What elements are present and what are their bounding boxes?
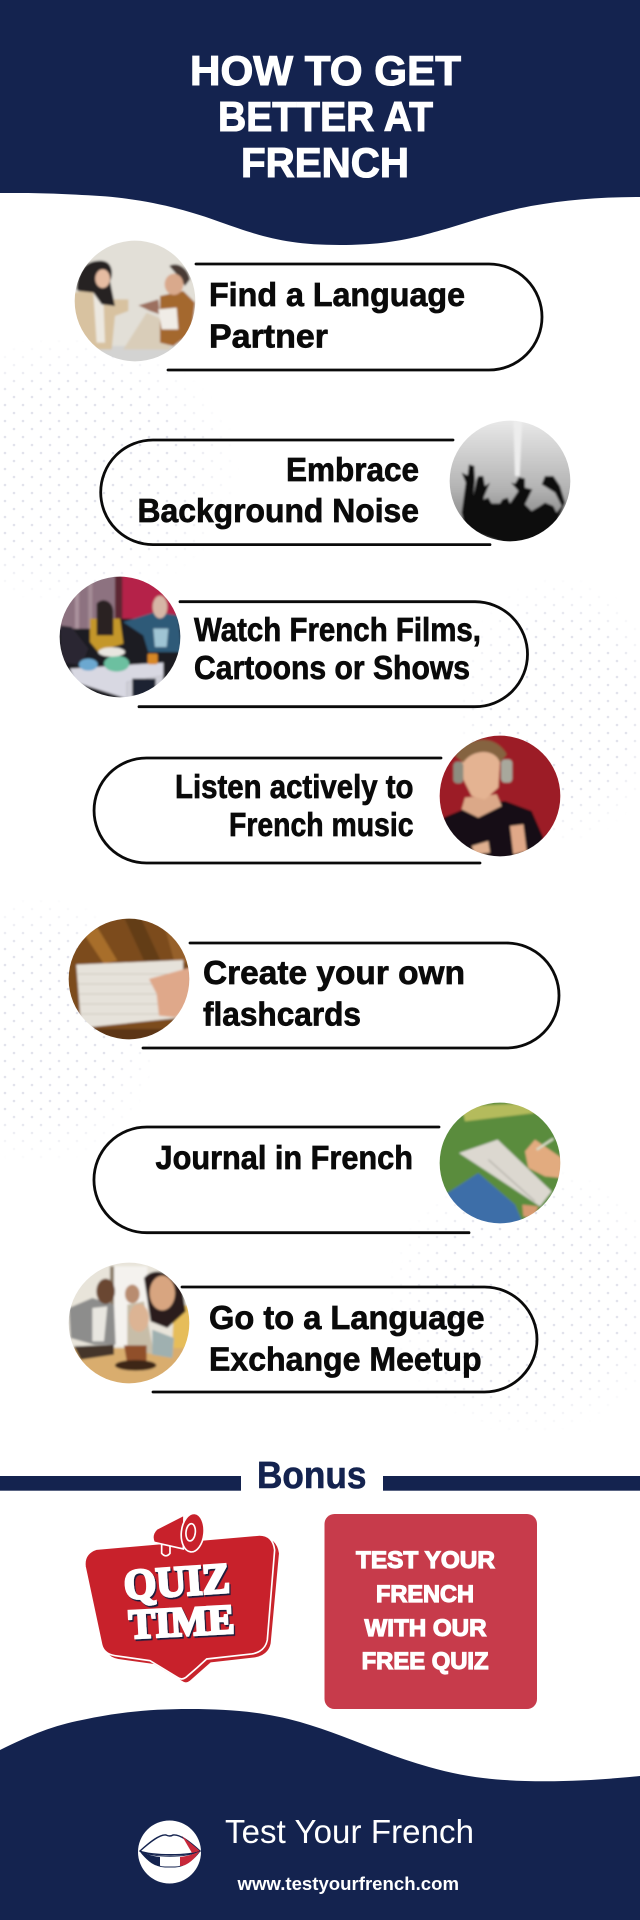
label 1: [209, 276, 465, 354]
quiz time badge: [85, 1512, 279, 1682]
label 4: [175, 768, 414, 843]
pill outline 5: [143, 943, 559, 1048]
label 4: French music: [229, 806, 414, 843]
title: BETTER AT: [218, 93, 433, 140]
badge text: [122, 1555, 235, 1647]
label 1: Find a Language: [209, 276, 465, 313]
label 5: flashcards: [203, 996, 361, 1033]
label 3: Watch French Films,: [194, 611, 481, 648]
pill outline 1: [168, 264, 542, 370]
pill outline 7: [153, 1287, 537, 1392]
quiz call-to-action panel: TEST YOUR: [356, 1547, 495, 1574]
label 5: [203, 954, 465, 1033]
label 2: [138, 451, 419, 529]
label 7: Go to a Language: [209, 1299, 484, 1336]
item 2: embrace background noise: [101, 416, 575, 546]
footer wave: [0, 1709, 640, 1920]
item 3: watch french films: [55, 572, 528, 707]
pill outline 3: [139, 602, 528, 707]
photo: crowd with raised hands: [450, 420, 570, 542]
bonus heading with side bars: Bonus: [257, 1455, 366, 1497]
label 5: Create your own: [203, 954, 465, 991]
website url: www.testyourfrench.com: [236, 1874, 459, 1894]
item 7: language exchange meetup: [64, 1258, 537, 1392]
label 1: Partner: [209, 318, 328, 354]
label 6: Journal in French: [156, 1139, 413, 1176]
item 5: create flashcards: [64, 914, 559, 1048]
icon: megaphone: [153, 1512, 206, 1556]
item 1: find a language partner: [70, 236, 542, 370]
title: [190, 47, 461, 186]
title: HOW TO GET: [190, 47, 461, 94]
label 3: Cartoons or Shows: [194, 649, 470, 686]
quiz call-to-action panel: FREE QUIZ: [362, 1648, 489, 1675]
label 2: Embrace: [286, 451, 419, 488]
badge text: QUIZ: [122, 1555, 231, 1609]
label 4: Listen actively to: [175, 768, 414, 805]
photo: friends in a cafe: [68, 1262, 190, 1384]
quiz call-to-action panel: WITH OUR: [364, 1615, 486, 1642]
badge body: [85, 1535, 275, 1679]
title: FRENCH: [241, 139, 409, 186]
photo: man with headphones: [440, 736, 560, 856]
pill outline 2: [101, 440, 490, 545]
brand name: Test Your French: [225, 1813, 474, 1850]
label 2: Background Noise: [138, 492, 419, 529]
logo: french flag lips: [138, 1820, 201, 1884]
label 3: [194, 611, 481, 686]
pill outline 4: [94, 758, 480, 863]
pill outline 6: [94, 1127, 469, 1233]
item 4: listen to french music: [94, 731, 565, 863]
badge text: TIME: [128, 1596, 235, 1647]
photo: hand holding flashcard: [68, 918, 190, 1040]
quiz call-to-action panel: [324, 1514, 537, 1709]
background dot patterns: [4, 349, 636, 1421]
label 7: [209, 1299, 484, 1378]
photo: writing in a journal on grass: [440, 1102, 560, 1224]
label 7: Exchange Meetup: [209, 1341, 482, 1378]
photo: friends watching tv: [60, 576, 180, 698]
item 6: journal in french: [94, 1098, 565, 1233]
quiz call-to-action panel: FRENCH: [376, 1581, 474, 1608]
photo: two women talking: [74, 240, 196, 362]
bonus heading with side bars: [0, 1455, 640, 1497]
header wave: [0, 0, 640, 245]
badge shadow layer: [89, 1538, 279, 1682]
